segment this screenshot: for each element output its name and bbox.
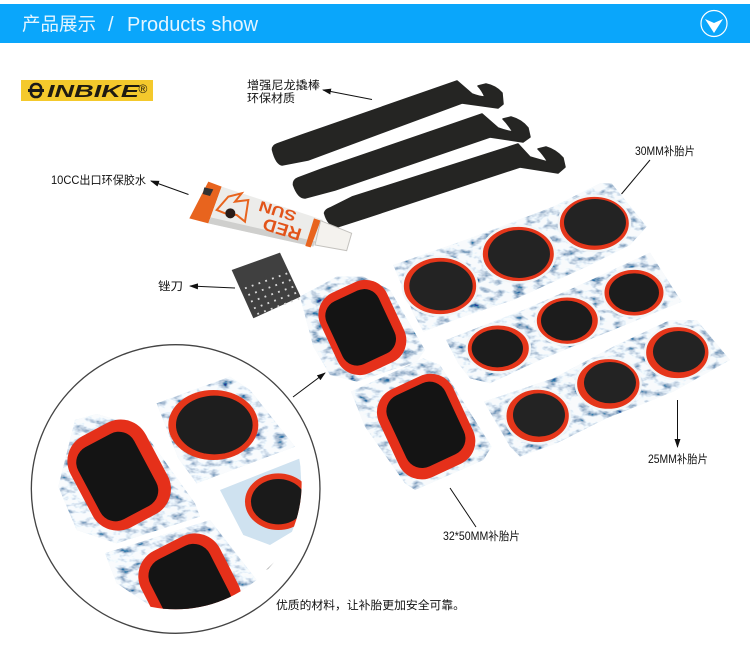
INBIKE logo [21, 80, 153, 101]
detail: round patch [157, 377, 295, 483]
detail: rectangular patch [57, 409, 200, 543]
label: 32x50MM patches: 32*50MM补胎片 [443, 529, 520, 543]
caption: 优质的材料，让补胎更加安全可靠。 [276, 598, 465, 612]
arrow: 30MM label [622, 160, 650, 194]
patch strip: 30MM [393, 183, 647, 332]
large patch: upper [300, 272, 425, 383]
label: 30MM patches: 30MM补胎片 [635, 144, 695, 158]
label: levers: 增强尼龙撬棒 [247, 78, 321, 92]
header band [0, 4, 750, 43]
INBIKE logo: INBIKE [47, 81, 141, 101]
label: glue: 10CC出口环保胶水 [51, 173, 146, 187]
large patch: lower [351, 358, 492, 490]
icon: chevron down in circle [701, 10, 727, 36]
patch strip: 25MM [484, 320, 730, 457]
tyre levers [272, 81, 565, 227]
arrow: rasp label [190, 286, 235, 288]
arrow: glue label [151, 181, 188, 194]
arrow: 25MM label [676, 400, 678, 447]
glue tube [189, 182, 352, 251]
INBIKE logo: ® [138, 82, 148, 96]
patch strip: middle [446, 253, 682, 383]
arrow: levers label [323, 90, 372, 100]
header title: / [108, 14, 114, 36]
detail: lower rectangular patch [105, 520, 256, 610]
glue tube: RED [260, 214, 304, 245]
detail: partial round patch [220, 458, 302, 545]
rasp scraper [232, 253, 301, 318]
glue tube: SUN [257, 197, 298, 223]
header title: 产品展示 [22, 14, 96, 34]
arrow: circle to patch [293, 373, 325, 397]
arrow: 32x50MM label [450, 488, 476, 527]
label: 25MM patches: 25MM补胎片 [648, 452, 708, 466]
magnifier circle detail [31, 345, 320, 650]
header title [22, 14, 259, 36]
label: levers material: 环保材质 [247, 91, 295, 105]
label: rasp: 锉刀 [158, 279, 183, 293]
header title: Products show [127, 14, 259, 36]
